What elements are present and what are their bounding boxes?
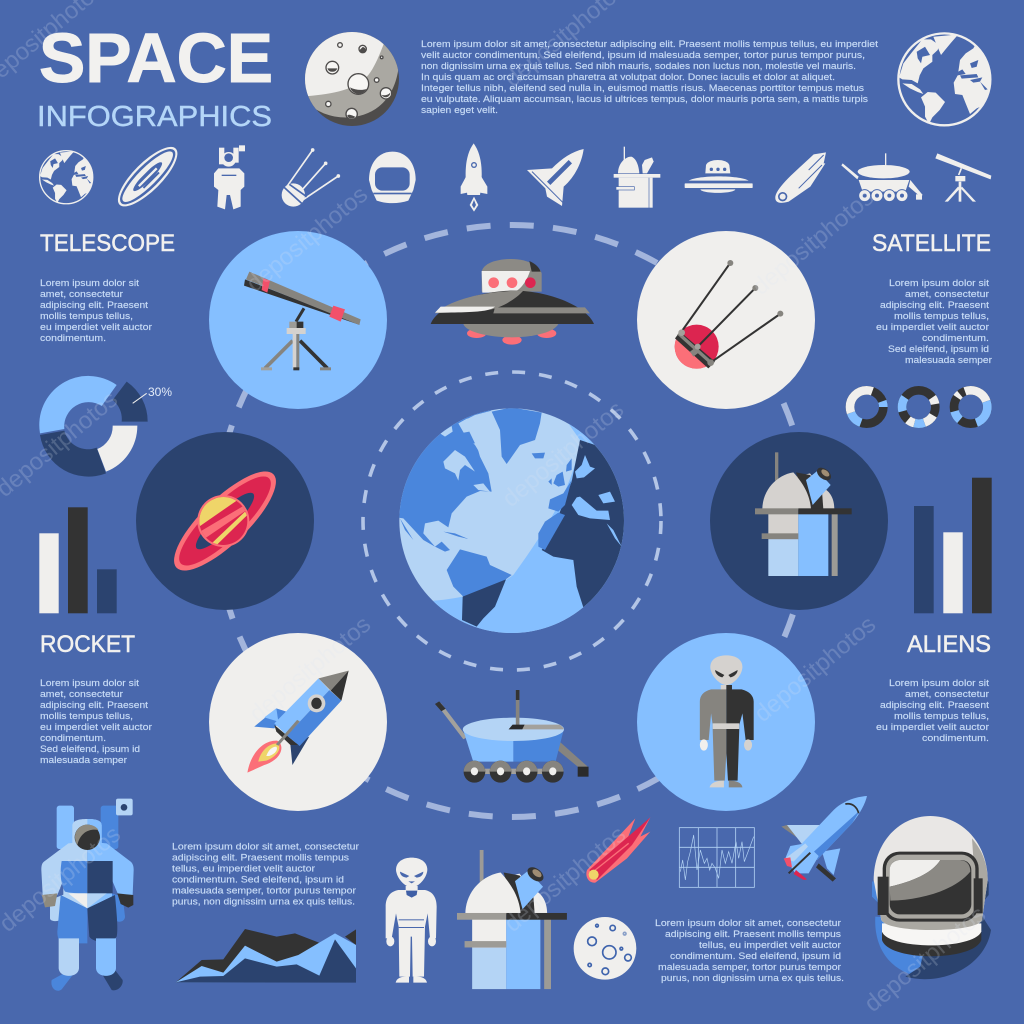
donut chart 30%	[39, 376, 172, 477]
intro text block: In quis quam ac orci accumsan pharetra at volutpat dolor. Donec iaculis et dolor at aliquet.	[421, 71, 835, 82]
intro text block: velit auctor condimentum. Sed eleifend, ipsum id malesuada semper, tortor purus tempor purus,	[421, 49, 865, 60]
text: bottom right: condimentum. Sed eleifend, ipsum id	[670, 950, 841, 961]
watermark: depositphotos	[244, 611, 376, 728]
heading: rocket: ROCKET	[40, 631, 135, 658]
text: telescope: mollis tempus tellus,	[40, 310, 133, 321]
text: satellite: adipiscing elit. Praesent	[880, 299, 989, 310]
text: satellite: amet, consectetur	[905, 288, 989, 299]
text: telescope: adipiscing elit. Praesent	[40, 299, 148, 310]
icon: astronaut	[214, 145, 245, 209]
text: bottom right: Lorem ipsum dolor sit amet, consectetur	[655, 917, 841, 928]
three ring charts	[850, 390, 987, 424]
text: bottom right: malesuada semper, tortor purus tempor	[658, 961, 841, 972]
text: satellite: Lorem ipsum dolor sit	[889, 277, 989, 288]
text: satellite: malesuada semper	[905, 354, 992, 365]
astronaut	[41, 799, 134, 991]
icon: observatory	[614, 147, 660, 208]
text: rocket: condimentum.	[40, 732, 106, 743]
telescope illustration	[244, 272, 361, 370]
rover	[437, 690, 589, 783]
text: bottom left: tellus, eu imperdiet velit auctor	[172, 862, 315, 874]
south america	[447, 549, 512, 597]
donut chart 30%: 30%	[148, 385, 172, 399]
text: bottom left: condimentum. Sed eleifend, ipsum id	[172, 874, 344, 884]
text: satellite	[876, 277, 992, 365]
text: bottom right: purus, non dignissim urna ex quis tellus.	[661, 972, 844, 983]
text: aliens: eu imperdiet velit auctor	[876, 721, 989, 732]
watermark: depositphotos	[241, 181, 373, 298]
watermark: depositphotos	[747, 184, 879, 301]
intro text block	[421, 38, 878, 115]
greenland	[492, 407, 542, 464]
UFO	[431, 259, 594, 345]
icon: comet	[775, 152, 826, 203]
rocket illustration	[247, 671, 349, 773]
section: satellite circle	[637, 231, 815, 409]
small alien	[386, 858, 437, 983]
text: aliens: mollis tempus tellus,	[894, 710, 989, 721]
icon: UFO	[685, 160, 753, 193]
text: rocket: amet, consectetur	[40, 688, 123, 699]
icon: rover	[841, 153, 923, 202]
text: rocket: malesuada semper	[40, 754, 127, 765]
text: telescope: Lorem ipsum dolor sit	[40, 277, 139, 288]
heading: satellite: SATELLITE	[872, 230, 991, 257]
ring 2	[902, 390, 935, 424]
text: bottom left: purus, non dignissim urna ex quis tellus.	[172, 896, 355, 906]
icon: helmet	[369, 152, 416, 203]
alien illustration	[700, 655, 754, 787]
title	[37, 19, 273, 133]
icon: globe small	[40, 151, 94, 204]
bar chart left	[39, 507, 117, 613]
icon: rocket	[461, 143, 487, 212]
intro text block: Lorem ipsum dolor sit amet, consectetur adipiscing elit. Praesent mollis tempus tellus, eu imperdiet	[421, 38, 878, 49]
outer dashed orbit	[216, 225, 808, 817]
text: bottom left: malesuada semper, tortor purus tempor	[172, 884, 356, 896]
europe lit side	[548, 480, 572, 512]
satellite illustration	[674, 260, 784, 369]
watermark: depositphotos	[749, 611, 881, 728]
heading: aliens: ALIENS	[907, 631, 991, 658]
text: aliens: Lorem ipsum dolor sit	[889, 677, 989, 688]
text: telescope: condimentum.	[40, 332, 106, 343]
text: bottom left: adipiscing elit. Praesent mollis tempus	[172, 852, 349, 862]
heading: telescope: TELESCOPE	[40, 230, 175, 257]
text: telescope	[40, 277, 152, 343]
text: bottom right: adipiscing elit. Praesent mollis tempus	[665, 928, 841, 939]
icon: ringed planet	[110, 139, 186, 215]
text: rocket: Sed eleifend, ipsum id	[40, 743, 140, 754]
small moon	[574, 917, 636, 980]
text: rocket: eu imperdiet velit auctor	[40, 721, 152, 732]
ring 3	[954, 390, 987, 424]
intro text block: eu vulputate. Aliquam accumsan, lacus id ultrices tempus, dolor mauris porta sem, a mattis turpis	[421, 93, 868, 104]
text: aliens: condimentum.	[922, 732, 989, 743]
text: rocket: mollis tempus tellus,	[40, 710, 133, 721]
text: telescope: eu imperdiet velit auctor	[40, 321, 152, 332]
text: aliens: adipiscing elit. Praesent	[880, 699, 989, 710]
text: satellite: Sed eleifend, ipsum id	[888, 343, 989, 354]
meteor	[586, 817, 650, 883]
bar chart right	[914, 478, 992, 613]
section: alien circle	[637, 633, 815, 811]
watermark: depositphotos	[499, 821, 631, 938]
intro text block: non dignissim urna ex quis tellus. Sed nibh mauris, sodales non luctus non, molestie vel mauris.	[421, 60, 856, 71]
icon: globe top right	[898, 33, 993, 125]
observatory illustration	[755, 452, 852, 576]
intro text block: sapien eget velit.	[421, 104, 498, 115]
text: bottom right	[655, 917, 844, 983]
section: observatory circle	[710, 432, 888, 610]
icon: moon	[305, 32, 399, 126]
intro text block: Integer tellus nibh, eleifend sed nulla in, euismod mattis risus. Maecenas porttitor tempus metus	[421, 82, 864, 93]
icon: shuttle	[527, 149, 584, 206]
text: bottom left: Lorem ipsum dolor sit amet, consectetur	[172, 840, 359, 852]
north america	[400, 410, 492, 546]
line chart	[679, 828, 754, 887]
inner dashed orbit	[363, 372, 661, 670]
observatory bottom	[457, 850, 567, 989]
watermark: depositphotos	[497, 396, 629, 513]
ring 1	[850, 390, 883, 424]
text: telescope: amet, consectetur	[40, 288, 123, 299]
shuttle	[781, 796, 867, 882]
text: rocket: adipiscing elit. Praesent	[40, 699, 148, 710]
text: bottom right: tellus, eu imperdiet velit auctor	[699, 939, 841, 950]
icon: satellite	[282, 149, 339, 207]
central earth	[399, 408, 624, 633]
saturn illustration	[174, 472, 276, 570]
title: SPACE	[39, 19, 273, 97]
text: satellite: condimentum.	[922, 332, 989, 343]
section: saturn circle	[136, 432, 314, 610]
area chart	[176, 929, 356, 983]
helmet	[872, 816, 991, 979]
text: rocket	[40, 677, 152, 765]
text: satellite: eu imperdiet velit auctor	[876, 321, 989, 332]
text: rocket: Lorem ipsum dolor sit	[40, 677, 139, 688]
section: telescope circle	[209, 231, 387, 409]
watermark: depositphotos	[859, 901, 991, 1018]
text: satellite: mollis tempus tellus,	[894, 310, 989, 321]
night ocean	[433, 424, 624, 633]
europe and africa night side	[542, 440, 633, 607]
icon: telescope	[935, 153, 991, 202]
icon row	[40, 139, 991, 215]
text: bottom left	[172, 840, 359, 906]
text: aliens: amet, consectetur	[905, 688, 989, 699]
section: rocket circle	[209, 633, 387, 811]
title: INFOGRAPHICS	[37, 101, 272, 133]
text: aliens	[876, 677, 989, 743]
